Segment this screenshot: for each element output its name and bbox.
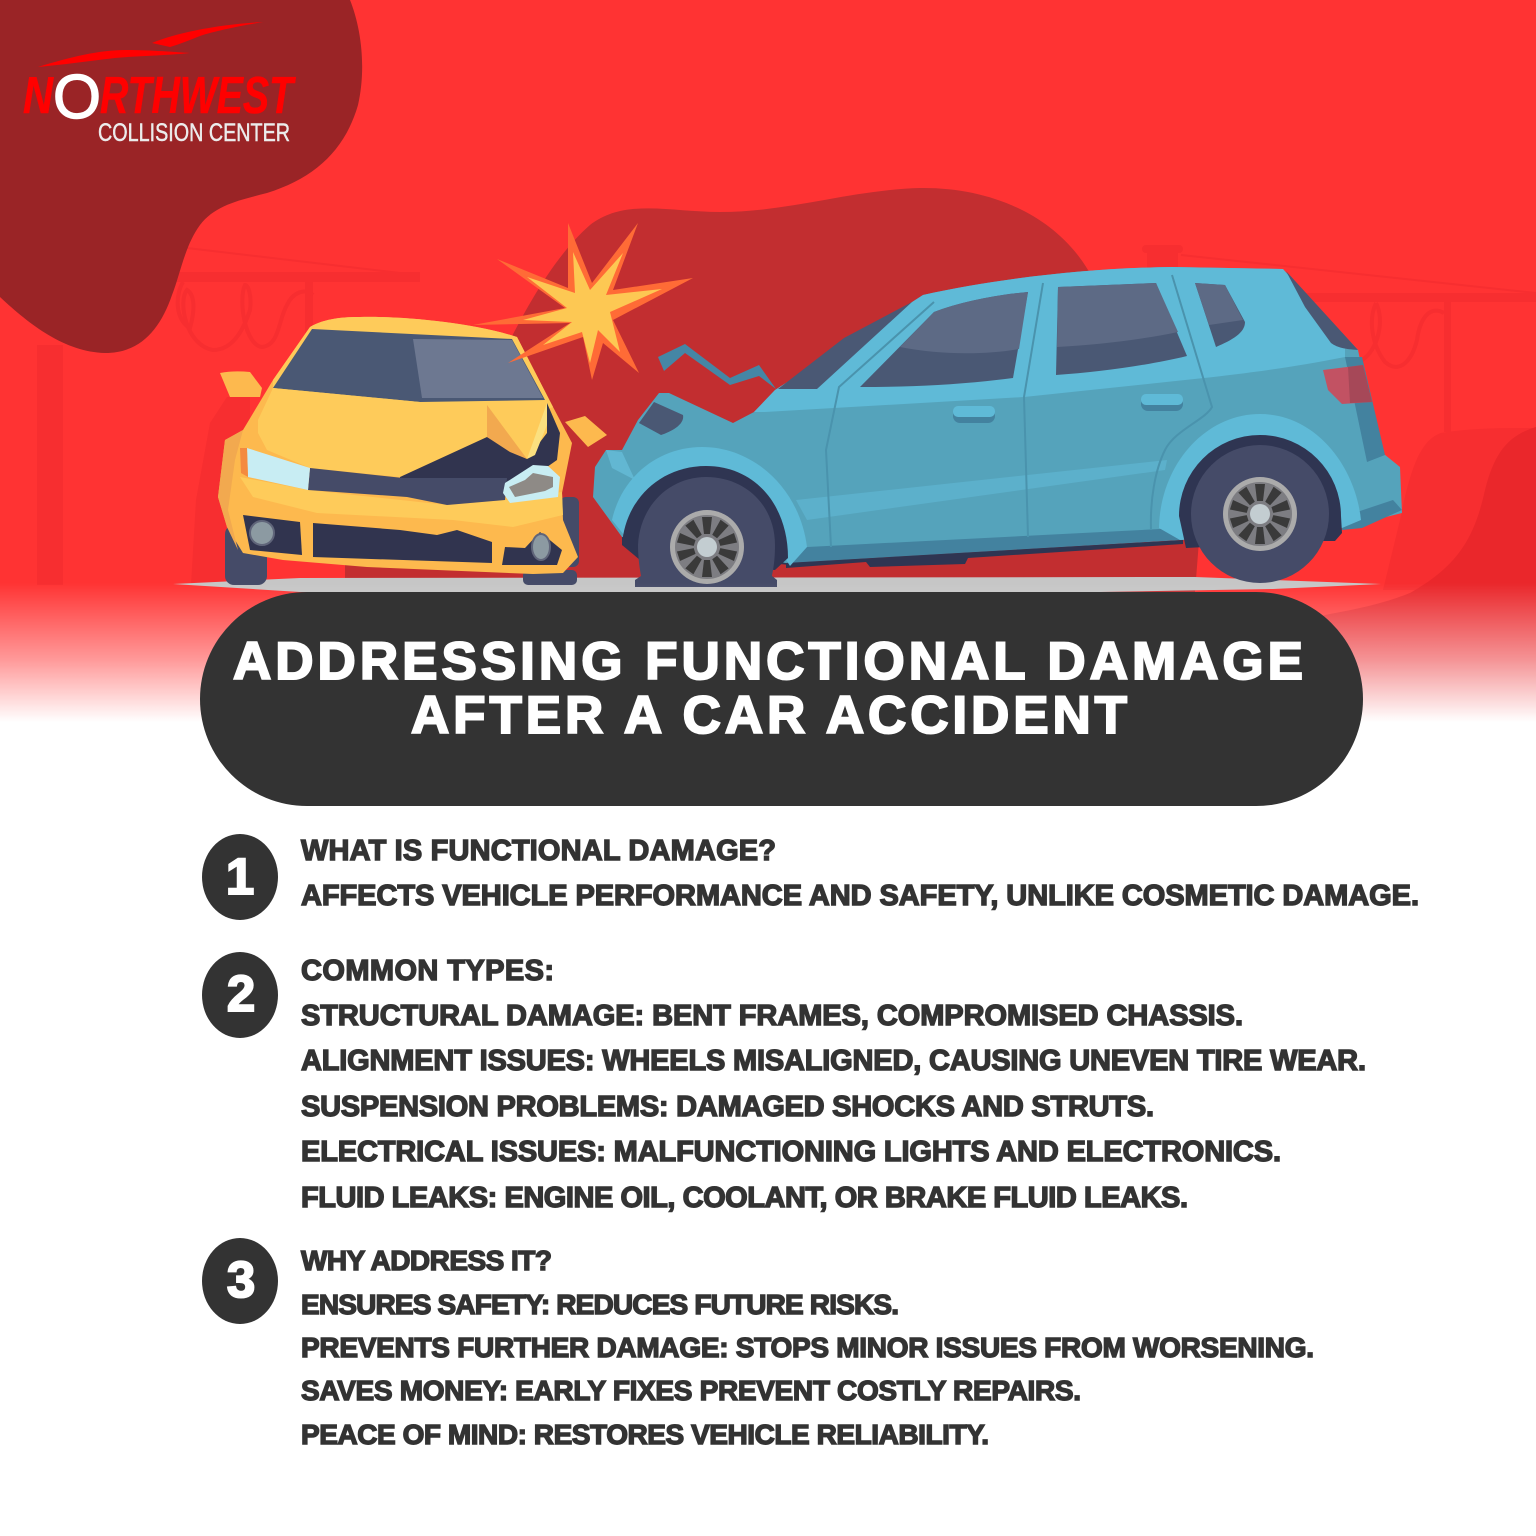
rear lower bumper bbox=[1342, 500, 1402, 530]
amber indicator bbox=[240, 448, 248, 477]
logo swoosh bbox=[38, 22, 263, 67]
front arch liner bbox=[622, 466, 788, 570]
rear wheel arch bbox=[1159, 414, 1361, 540]
background: mid red blob behind cars bbox=[345, 188, 1210, 592]
side body stripe bbox=[796, 460, 1167, 520]
logo wordmark: N bbox=[23, 67, 54, 125]
broken headlight interior bbox=[509, 473, 553, 497]
background: fade to white bbox=[0, 583, 1536, 730]
yellow car tyres bbox=[225, 497, 579, 585]
section 2 text: FLUID LEAKS: ENGINE OIL, COOLANT, OR BRAKE FLUID LEAKS. bbox=[301, 1182, 1188, 1214]
section 3 text bbox=[301, 1245, 1314, 1450]
logo: Northwest Collision Center bbox=[23, 22, 296, 147]
front wheel arch bbox=[612, 447, 807, 566]
section 3 text: ENSURES SAFETY: REDUCES FUTURE RISKS. bbox=[301, 1289, 899, 1320]
hood crease bbox=[487, 405, 527, 459]
section 1 text: AFFECTS VEHICLE PERFORMANCE AND SAFETY, UNLIKE COSMETIC DAMAGE. bbox=[301, 880, 1419, 912]
crumpled hood bbox=[658, 344, 776, 389]
rear edge shading bbox=[1345, 357, 1385, 462]
door seams bbox=[826, 275, 1212, 547]
section 2 text: STRUCTURAL DAMAGE: BENT FRAMES, COMPROMISED CHASSIS. bbox=[301, 1000, 1243, 1032]
background: dark blob behind logo bbox=[0, 0, 362, 353]
section 3: why address it bbox=[202, 1238, 1314, 1450]
logo wordmark: COLLISION CENTER bbox=[98, 119, 290, 147]
title text: AFTER A CAR ACCIDENT bbox=[411, 686, 1127, 745]
door handles bbox=[953, 394, 1183, 423]
front side window upper tone bbox=[900, 292, 1028, 353]
rear hub bbox=[1223, 477, 1297, 551]
section 3 text: PREVENTS FURTHER DAMAGE: STOPS MINOR ISSUES FROM WORSENING. bbox=[301, 1332, 1314, 1363]
logo wordmark: O bbox=[53, 63, 101, 132]
number badge 3 bbox=[202, 1238, 278, 1324]
number badge 2: 2 bbox=[227, 965, 255, 1022]
illustration: blue car bbox=[593, 267, 1402, 587]
banner pill bbox=[200, 592, 1363, 806]
icon: impact star bbox=[473, 223, 693, 380]
rear glass bbox=[1286, 271, 1358, 350]
front bumper highlight bbox=[606, 450, 635, 480]
broken headlight bbox=[503, 465, 560, 503]
number badge 3: 3 bbox=[227, 1251, 255, 1308]
lower centre grille bbox=[313, 523, 492, 563]
background: red field bbox=[0, 0, 1536, 730]
section 1 text bbox=[301, 835, 1419, 912]
section 3 text: PEACE OF MIND: RESTORES VEHICLE RELIABILITY. bbox=[301, 1419, 989, 1450]
front side window bbox=[860, 292, 1028, 387]
yellow car roof bbox=[273, 317, 553, 410]
windshield reflection bbox=[413, 339, 543, 398]
upper body highlight bbox=[754, 267, 1345, 412]
section 2 text: ELECTRICAL ISSUES: MALFUNCTIONING LIGHTS AND ELECTRONICS. bbox=[301, 1136, 1281, 1168]
section 2 text: ALIGNMENT ISSUES: WHEELS MISALIGNED, CAUSING UNEVEN TIRE WEAR. bbox=[301, 1045, 1366, 1077]
blue car body bbox=[593, 267, 1402, 563]
left headlight bbox=[247, 448, 310, 490]
section 1: what is functional damage bbox=[202, 834, 1419, 920]
tail light shaded side bbox=[1348, 365, 1372, 403]
front arch underside bbox=[622, 500, 790, 565]
bumper band bbox=[240, 477, 563, 527]
section 2: common types bbox=[202, 952, 1366, 1214]
yellow car mirrors bbox=[220, 371, 607, 447]
lower left vent bbox=[243, 515, 302, 555]
number badge 2 bbox=[202, 952, 278, 1038]
front hub bbox=[670, 510, 744, 584]
section 2 text: SUSPENSION PROBLEMS: DAMAGED SHOCKS AND STRUTS. bbox=[301, 1091, 1154, 1123]
rear arch liner bbox=[1179, 435, 1342, 548]
grille band bbox=[308, 468, 507, 505]
number badge 1 bbox=[202, 834, 278, 920]
yellow car hood bbox=[258, 388, 547, 477]
illustration: yellow car bbox=[218, 317, 607, 585]
title banner bbox=[200, 592, 1363, 806]
middle window bbox=[1056, 283, 1187, 375]
title text: ADDRESSING FUNCTIONAL DAMAGE bbox=[233, 632, 1303, 691]
tail light bbox=[1323, 365, 1372, 404]
title text bbox=[233, 632, 1303, 745]
rear quarter window bbox=[1195, 283, 1245, 347]
yellow car windshield bbox=[273, 329, 545, 402]
section 2 text: COMMON TYPES: bbox=[301, 955, 554, 987]
section 3 text: SAVES MONEY: EARLY FIXES PREVENT COSTLY REPAIRS. bbox=[301, 1375, 1081, 1406]
sill bbox=[788, 528, 1180, 563]
section 3 text: WHY ADDRESS IT? bbox=[301, 1245, 552, 1276]
section 1 text: WHAT IS FUNCTIONAL DAMAGE? bbox=[301, 835, 776, 867]
yellow car body bbox=[218, 317, 578, 574]
section 2 text bbox=[301, 955, 1366, 1214]
logo wordmark: RTHWEST bbox=[100, 67, 296, 125]
left fog lamp bbox=[250, 521, 274, 545]
underbody bbox=[786, 540, 1183, 568]
middle window upper tone bbox=[1057, 283, 1178, 347]
lower right vent bbox=[502, 532, 562, 565]
number badge 1: 1 bbox=[226, 848, 254, 905]
windshield bbox=[778, 302, 912, 389]
right fog lamp bbox=[532, 534, 550, 560]
background: faint garage silhouettes bbox=[20, 245, 1536, 730]
ground shadow bbox=[173, 577, 1381, 592]
rear quarter window upper tone bbox=[1195, 283, 1243, 325]
yellow car left shading bbox=[218, 430, 243, 550]
logo wordmark bbox=[23, 63, 296, 147]
hood pale fold bbox=[527, 403, 547, 459]
engine bay bbox=[400, 403, 560, 500]
hood vent bbox=[639, 402, 683, 435]
front flat tyre bbox=[635, 477, 777, 587]
rear tyre bbox=[1191, 445, 1329, 583]
